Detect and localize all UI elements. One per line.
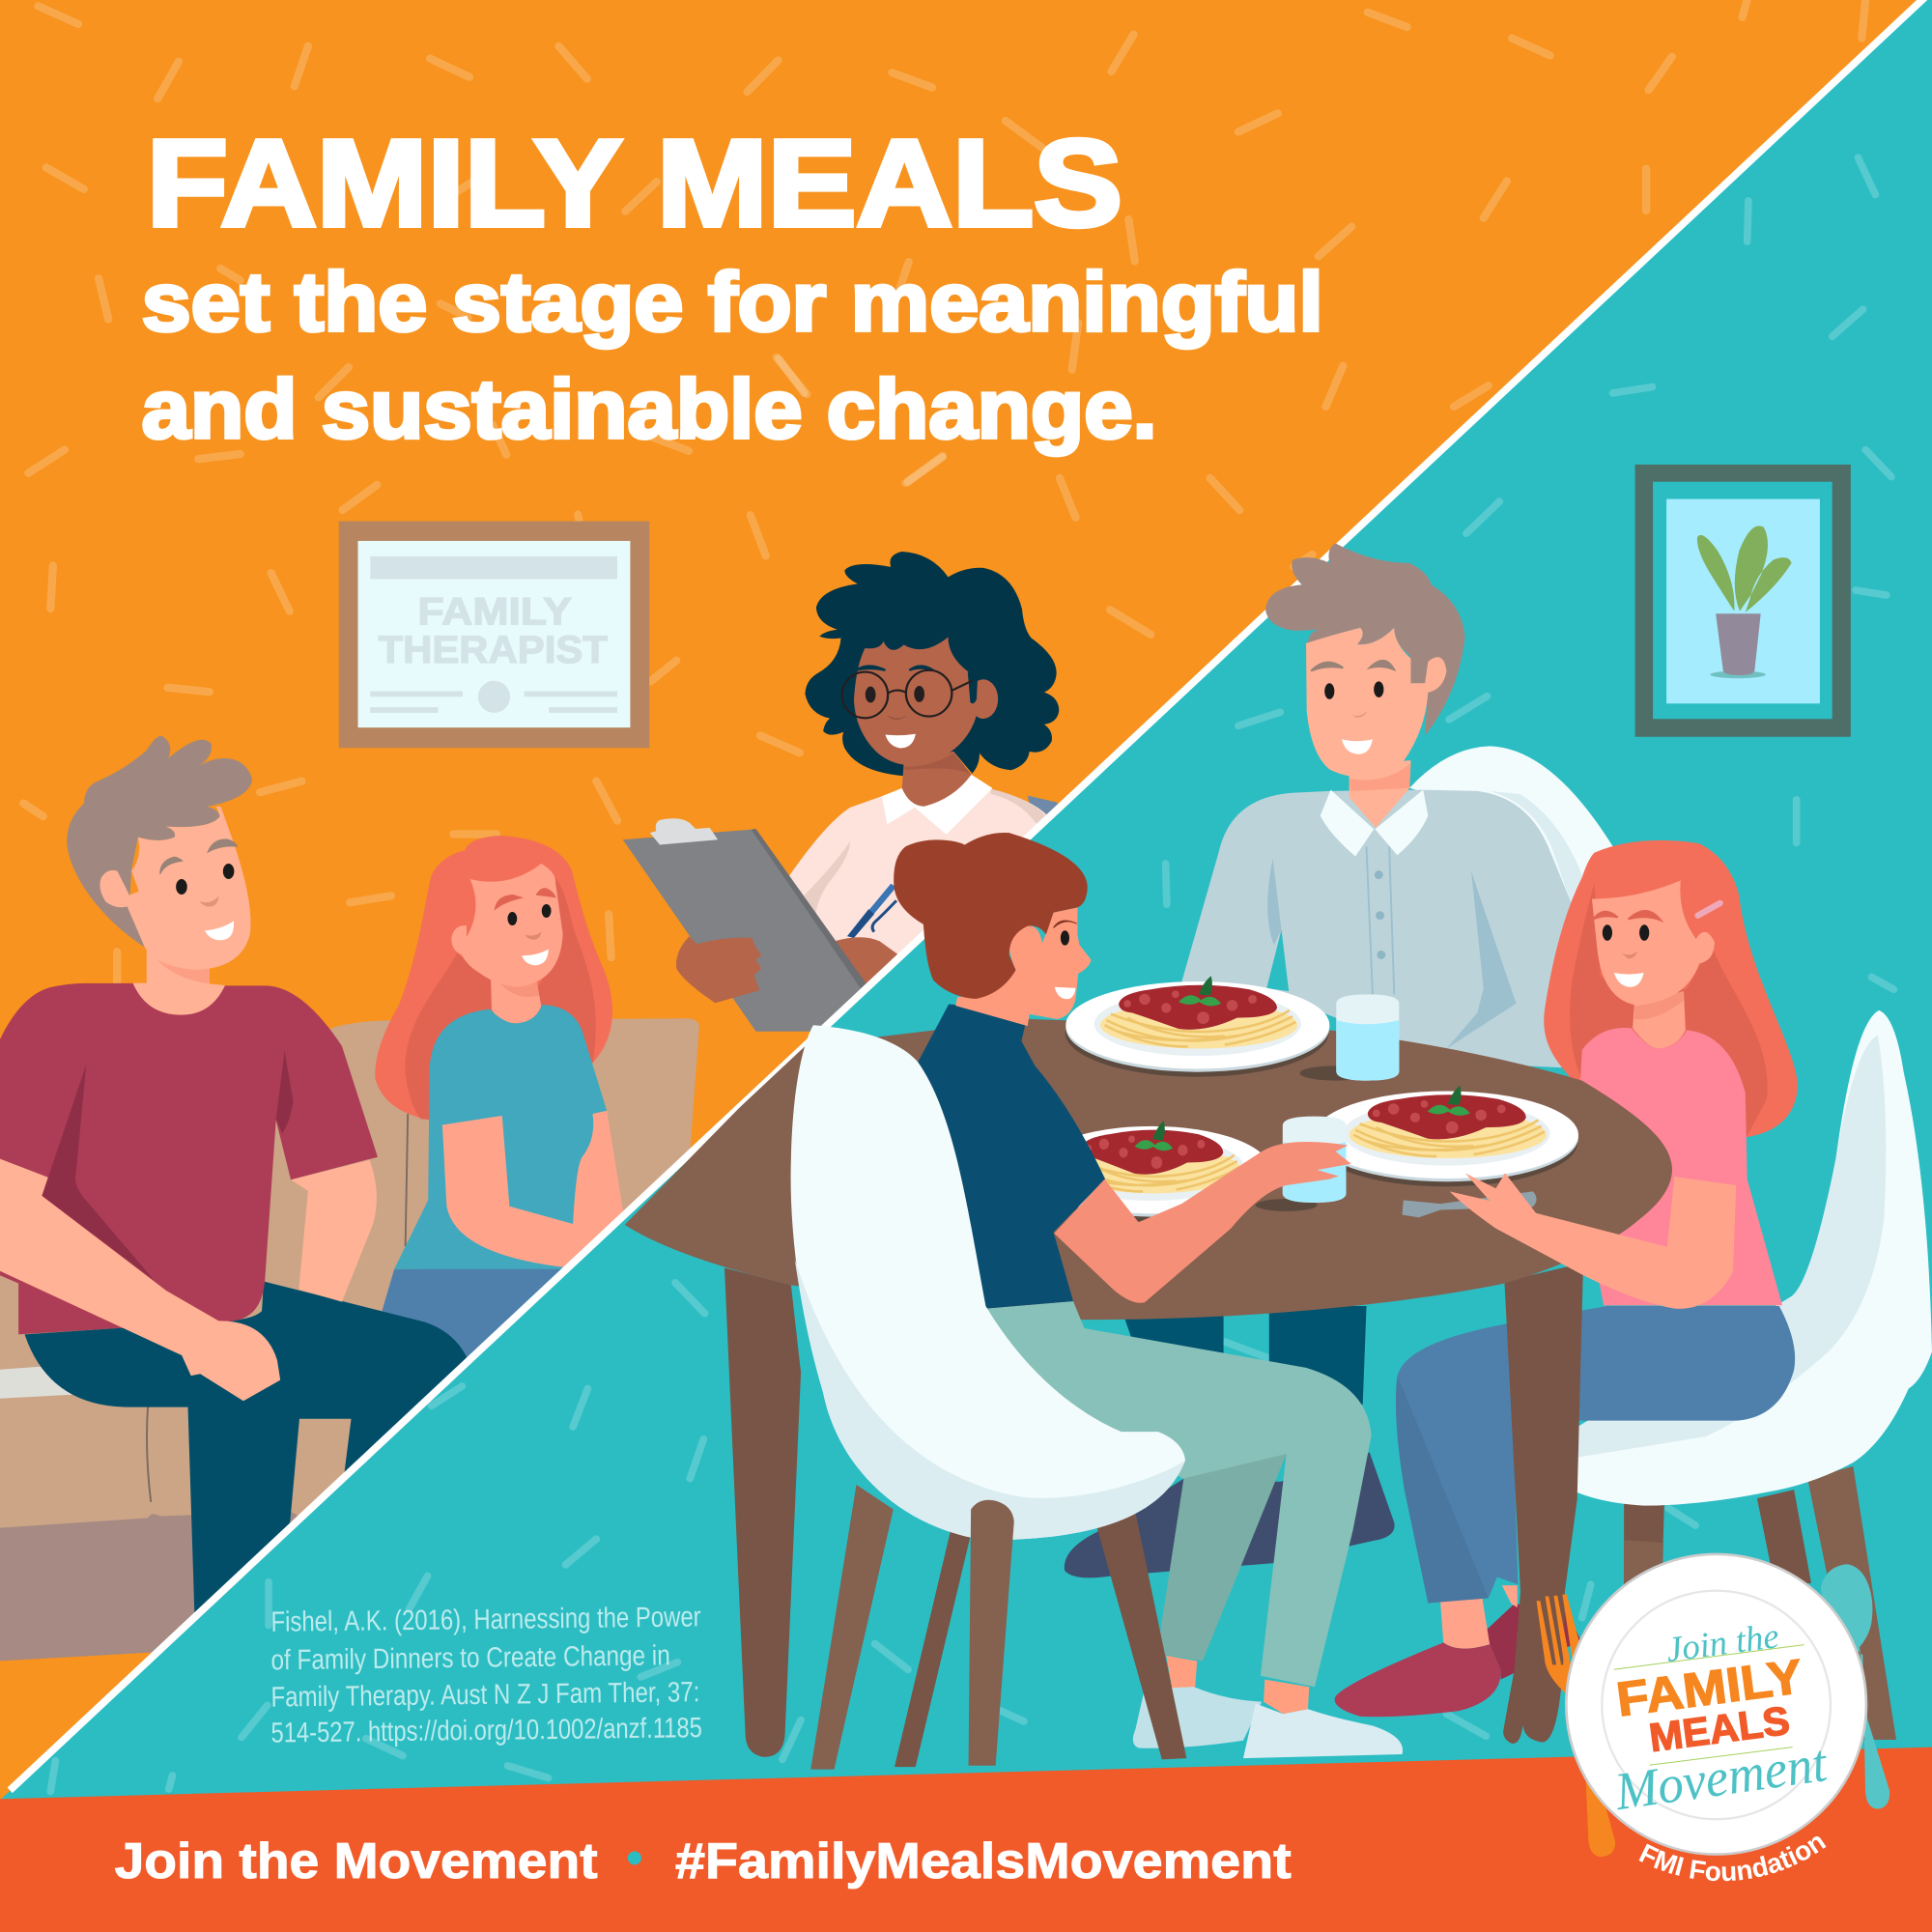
girl on couch [375, 836, 625, 1360]
bottom banner [0, 1747, 1932, 1932]
certificate: family therapist: THERAPIST [379, 629, 608, 671]
citation: Family Therapy. Aust N Z J Fam Ther, 37: [270, 1676, 700, 1714]
spaghetti plates [1033, 976, 1578, 1222]
mother seated at table with chair [791, 833, 1403, 1770]
plate disc [1566, 1554, 1866, 1855]
logo: join the: Join the [1663, 1615, 1781, 1669]
subtitle line two: and sustainable change. [142, 362, 1157, 456]
clipboard with therapist hand [623, 818, 868, 1032]
icon: orange fork [1537, 1595, 1615, 1857]
logo: fmi foundation: FMI Foundation [1638, 1836, 1826, 1882]
father [1181, 543, 1613, 1068]
couch [0, 1018, 699, 1661]
logo: movement: Movement [1610, 1733, 1832, 1821]
banner text: join the movement: Join the Movement [115, 1833, 598, 1889]
table [625, 1019, 1672, 1757]
girl at table [1335, 840, 1798, 1717]
citation: 514-527. https://doi.org/10.1002/anzf.1185 [270, 1712, 702, 1749]
citation: of Family Dinners to Create Change in [270, 1639, 670, 1676]
citation: Fishel, A.K. (2016), Harnessing the Power [270, 1601, 701, 1638]
framed plant picture [1635, 465, 1851, 737]
water glasses [1283, 994, 1399, 1203]
logo: family: FAMILY [1613, 1649, 1805, 1727]
chair back legs [810, 1485, 971, 1770]
title: FAMILY MEALS [147, 115, 1122, 252]
logo: meals: MEALS [1647, 1698, 1792, 1760]
fork on table [1403, 1191, 1537, 1217]
banner text: hashtag: #FamilyMealsMovement [675, 1833, 1292, 1889]
logo: family meals movement plate [1565, 1553, 1889, 1882]
certificate: family therapist [339, 522, 649, 748]
plate inner ring [1602, 1591, 1831, 1819]
logo divider lines [1614, 1645, 1804, 1765]
icon: teal spoon [1821, 1564, 1889, 1809]
man on couch [0, 736, 469, 1619]
certificate: family therapist: FAMILY [417, 591, 572, 634]
banner dot [628, 1851, 641, 1864]
subtitle line one: set the stage for meaningful [142, 255, 1323, 349]
father's dark trousers and shoes [1065, 1306, 1395, 1577]
therapist [787, 552, 1065, 989]
girl's arm [1450, 1173, 1736, 1309]
girl's chair [1574, 1010, 1932, 1740]
citation [270, 1601, 702, 1749]
